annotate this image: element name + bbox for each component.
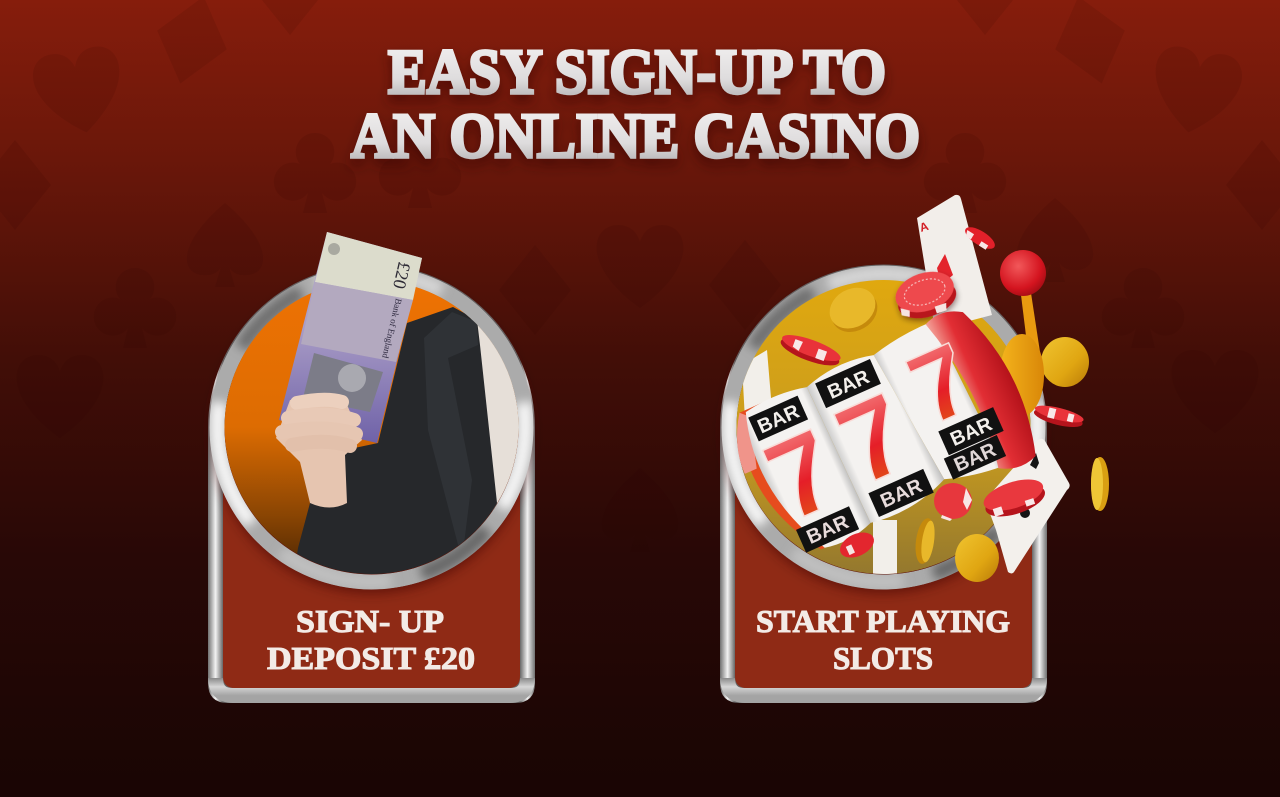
card behind left <box>742 350 897 590</box>
panel: start playing slots: A <box>918 219 930 235</box>
metal ring left <box>217 273 526 582</box>
right cap <box>924 298 1047 478</box>
big chip top <box>890 265 961 325</box>
metal ring right <box>729 273 1038 582</box>
playing card right <box>985 439 1070 574</box>
sevens <box>740 322 1003 545</box>
shirt <box>471 319 518 510</box>
playing card top <box>917 195 992 330</box>
sevens: 7 <box>820 369 928 509</box>
chip right <box>1032 402 1085 431</box>
banknote: Bank of England <box>380 298 404 360</box>
bar symbols <box>745 321 1016 553</box>
metal frame left <box>208 264 535 703</box>
jacket <box>297 307 497 574</box>
gold coin by lever <box>1041 337 1089 387</box>
left cap <box>727 397 838 562</box>
photo: hand holding banknote <box>224 287 518 574</box>
chips lower <box>836 473 1049 563</box>
bar symbols: BAR <box>947 413 996 451</box>
panel: sign-up deposit <box>208 232 535 703</box>
gold coins lower <box>913 457 1109 582</box>
label text left <box>267 603 475 676</box>
coin top <box>822 280 885 340</box>
sevens: 7 <box>748 405 856 545</box>
slot machine reels <box>718 298 1047 570</box>
bar symbols: BAR <box>951 439 1000 477</box>
label text right: START PLAYING <box>756 603 1010 639</box>
lever <box>1000 250 1046 352</box>
label text right: SLOTS <box>833 640 933 676</box>
red label plate right <box>735 428 1032 688</box>
red label plate left <box>223 428 520 688</box>
label text right <box>756 603 1010 676</box>
reel 1 <box>736 382 873 561</box>
title <box>351 37 920 171</box>
bar symbols: BAR <box>804 511 853 549</box>
banknote: £20 <box>389 260 415 291</box>
banknote <box>279 232 422 443</box>
gold disc <box>736 280 1030 574</box>
panel: start playing slots <box>718 195 1109 703</box>
title: EASY SIGN-UP TO <box>388 37 886 107</box>
title: AN ONLINE CASINO <box>351 101 920 171</box>
reel 3 <box>871 319 1004 496</box>
chip small top right <box>962 223 998 253</box>
sevens: 7 <box>893 322 989 447</box>
hand <box>276 400 362 508</box>
label text left: SIGN- UP <box>296 603 444 639</box>
chip left <box>778 330 843 371</box>
gold hub <box>1000 334 1044 416</box>
bar symbols: BAR <box>877 475 926 513</box>
bar symbols: BAR <box>824 366 873 404</box>
bar symbols: BAR <box>754 400 803 438</box>
label text left: DEPOSIT £20 <box>267 640 475 676</box>
reel 2 <box>804 345 949 526</box>
metal frame right <box>720 264 1047 703</box>
